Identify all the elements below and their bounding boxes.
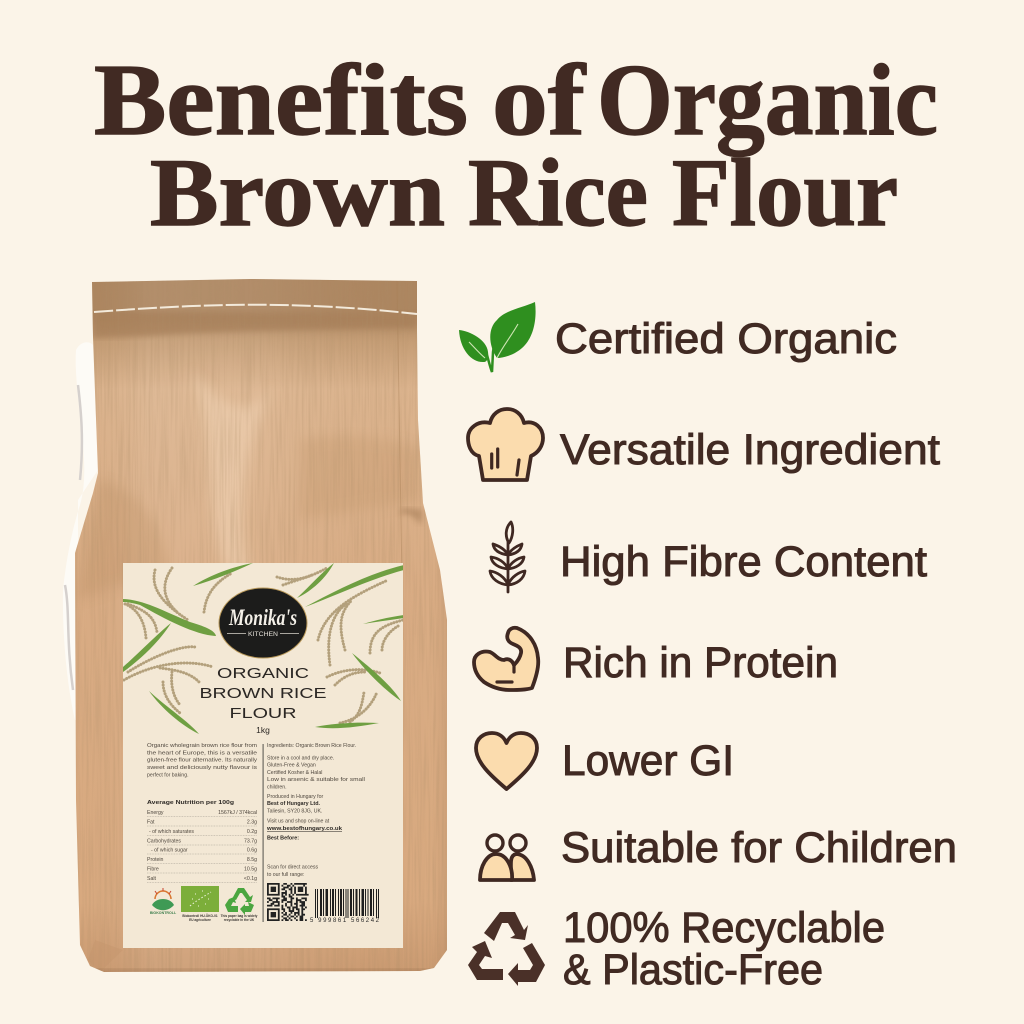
title: Flour [672, 139, 898, 246]
ingredients and storage text: Visit us and shop on-line at [267, 818, 330, 824]
benefit: recyclable and plastic-free [468, 904, 885, 994]
description text: gluten-free flour alternative. Its naturally [147, 758, 257, 764]
nutrition table [147, 800, 257, 882]
benefit: versatile ingredient: Versatile Ingredient [560, 426, 940, 474]
icon: chef hat [468, 409, 543, 480]
product name: ORGANIC [217, 666, 309, 682]
nutrition table: 0.2g [247, 829, 257, 835]
ingredients and storage text: Taliesin, SY20 8JG, UK. [267, 808, 322, 814]
brand logo: KITCHEN [248, 631, 278, 638]
nutrition table: 73.7g [244, 838, 257, 844]
ingredients and storage text: Produced in Hungary for [267, 794, 324, 800]
barcode: 5 999861 566242 [310, 918, 380, 924]
ingredients and storage text: Certified Kosher & Halal [267, 770, 322, 776]
title: Brown [150, 139, 445, 246]
product name: BROWN RICE [200, 686, 327, 702]
benefit: versatile ingredient [468, 409, 940, 480]
nutrition table: Protein [147, 857, 164, 863]
nutrition table: 8.5g [247, 857, 257, 863]
white inner liner peeking out [63, 342, 98, 720]
product name: 1kg [256, 725, 270, 735]
nutrition table: Fibre [147, 866, 159, 872]
nutrition table: Fat [147, 819, 155, 825]
logo: EU organic leaf: EU agriculture [189, 918, 211, 922]
nutrition table: 0.6g [247, 848, 257, 854]
icon: green leaves [459, 302, 536, 372]
brand logo [219, 588, 307, 658]
illustration: rice sprigs [124, 568, 403, 723]
logo: green recycling: recyclable in the UK [224, 918, 255, 922]
product name [200, 666, 327, 735]
benefit: recyclable and plastic-free: & Plastic-Free [563, 946, 823, 994]
logo: Biokontroll: BIOKONTROLL [150, 911, 177, 915]
bag body [75, 279, 447, 972]
description text: Organic wholegrain brown rice flour from [147, 743, 257, 749]
ingredients and storage text: Store in a cool and dry place. [267, 756, 334, 762]
ingredients and storage text [266, 743, 365, 878]
brand logo: Monika's [228, 605, 297, 630]
illustration: green leaves [123, 563, 404, 734]
logo: green recycling: This paper bag is widely [221, 914, 258, 918]
ingredients and storage text: Low in arsenic & suitable for small [267, 777, 365, 783]
logo: EU organic leaf [181, 886, 219, 922]
logo: EU organic leaf: Biokontroll HU-ÖKO-01 [182, 913, 218, 918]
nutrition table: 2.3g [247, 819, 257, 825]
nutrition table: 1567kJ / 374kcal [218, 810, 257, 816]
benefit: rich in protein: Rich in Protein [563, 639, 838, 687]
benefit: rich in protein [474, 628, 838, 690]
product name: FLOUR [230, 706, 296, 722]
ingredients and storage text: to our full range: [267, 872, 304, 878]
nutrition table: Average Nutrition per 100g [147, 800, 234, 806]
title: Rice [468, 139, 648, 246]
ingredients and storage text: Ingredients: Organic Brown Rice Flour. [267, 743, 356, 749]
nutrition table: Energy [147, 810, 164, 816]
ingredients and storage text: Gluten-Free & Vegan [267, 762, 316, 768]
title [94, 44, 938, 246]
benefit: certified organic: Certified Organic [555, 315, 897, 363]
barcode [310, 889, 380, 924]
certification logos [150, 886, 258, 922]
description text: sweet and deliciously nutty flavour is [147, 765, 258, 771]
icon: wheat [490, 522, 525, 592]
ingredients and storage text: Best of Hungary Ltd. [267, 801, 321, 807]
nutrition table: 10.5g [244, 866, 257, 872]
logo: green recycling [221, 888, 258, 922]
benefit: high fibre content [490, 522, 927, 592]
product label [123, 563, 404, 948]
nutrition table: - of which sugar [151, 848, 188, 854]
nutrition table: Carbohydrates [147, 838, 181, 844]
benefit: high fibre content: High Fibre Content [560, 538, 927, 586]
benefit: certified organic [459, 302, 897, 372]
icon: recycling arrows [468, 912, 545, 986]
benefit: lower GI [476, 733, 734, 789]
description text: perfect for baking. [147, 772, 189, 778]
ingredients and storage text: www.bestofhungary.co.uk [266, 826, 342, 832]
icon: heart [476, 733, 537, 789]
QR code [267, 884, 309, 920]
nutrition table: <0.1g [244, 876, 257, 882]
benefit: suitable for children: Suitable for Children [561, 824, 957, 872]
ingredients and storage text: children. [267, 784, 287, 790]
benefit: lower GI: Lower GI [562, 737, 734, 785]
divider [262, 744, 264, 922]
benefit: recyclable and plastic-free: 100% Recyclable [563, 904, 885, 952]
icon: two children [480, 835, 534, 880]
description text: the heart of Europe, this is a versatile [147, 750, 257, 756]
nutrition table: Salt [147, 876, 156, 882]
title: Organic [597, 44, 938, 157]
stitching [94, 305, 417, 314]
title: of [492, 44, 586, 157]
title: Benefits [94, 44, 468, 157]
ingredients and storage text: Best Before: [267, 836, 299, 842]
description text [147, 743, 258, 778]
ingredients and storage text: Scan for direct access [267, 864, 318, 870]
product: paper bag of flour [60, 270, 460, 980]
icon: flexed arm [474, 628, 538, 690]
nutrition table: - of which saturates [149, 829, 194, 835]
